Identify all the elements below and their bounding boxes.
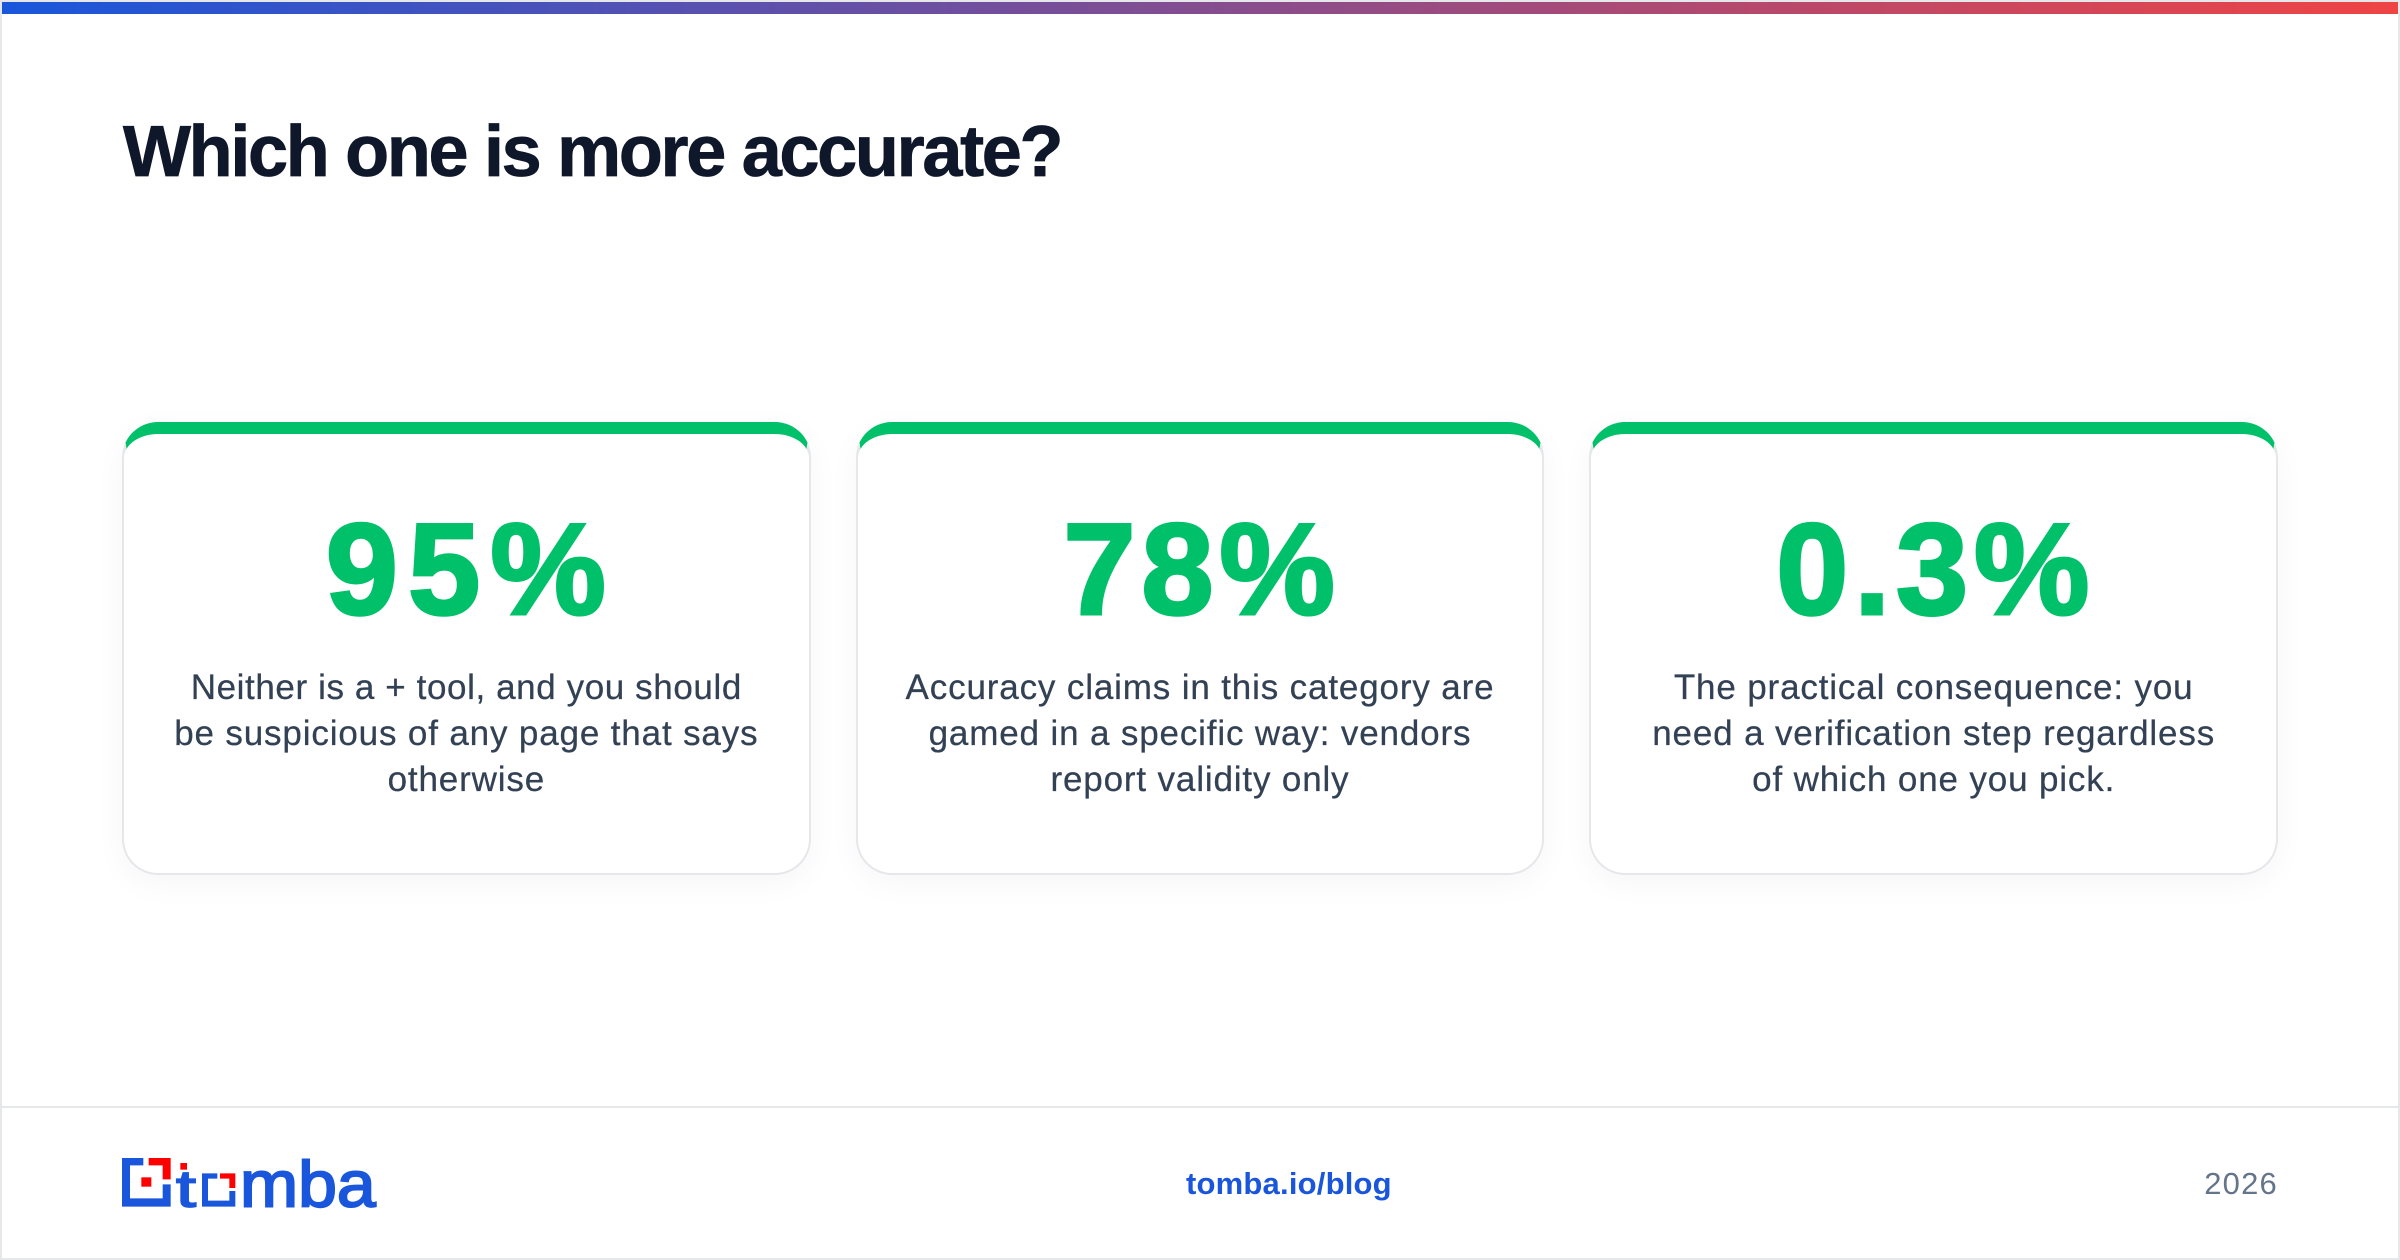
description: 95% card: otherwise bbox=[388, 760, 545, 799]
description: 0.3% card: need a verification step regardless bbox=[1652, 714, 2215, 753]
logo: tomba bbox=[122, 1148, 377, 1221]
stat: 78%: 78% bbox=[1063, 496, 1341, 642]
footer year: 2026 bbox=[2204, 1166, 2278, 1201]
footer divider bbox=[2, 1106, 2398, 1108]
description: 0.3% card bbox=[1652, 668, 2215, 799]
stat: 0.3%: 0.3% bbox=[1776, 496, 2095, 642]
stat: 95%: 95% bbox=[326, 496, 616, 642]
description: 95% card: Neither is a + tool, and you should bbox=[191, 668, 742, 707]
logo letter t: t bbox=[176, 1160, 196, 1218]
description: 0.3% card: of which one you pick. bbox=[1752, 760, 2115, 799]
description: 95% card: be suspicious of any page that says bbox=[174, 714, 758, 753]
top gradient bar bbox=[2, 2, 2398, 14]
icon: t dot bbox=[180, 1163, 187, 1170]
panel: 95% stat card bbox=[122, 422, 811, 875]
logo letters mba: mba bbox=[240, 1148, 376, 1221]
panel: 78% stat card bbox=[856, 422, 1544, 875]
description: 78% card bbox=[905, 668, 1494, 799]
description: 78% card: gamed in a specific way: vendors bbox=[929, 714, 1471, 753]
description: 78% card: Accuracy claims in this category are bbox=[906, 668, 1494, 707]
footer link: tomba.io/blog bbox=[1186, 1166, 1392, 1201]
panel: 0.3% stat card bbox=[1589, 422, 2278, 875]
description: 0.3% card: The practical consequence: you bbox=[1674, 668, 2194, 707]
description: 95% card bbox=[174, 668, 758, 799]
title: Which one is more accurate? bbox=[123, 112, 1061, 192]
icon: letter o mark bbox=[202, 1173, 235, 1207]
description: 78% card: report validity only bbox=[1050, 760, 1350, 799]
icon: logo mark bbox=[122, 1158, 171, 1207]
